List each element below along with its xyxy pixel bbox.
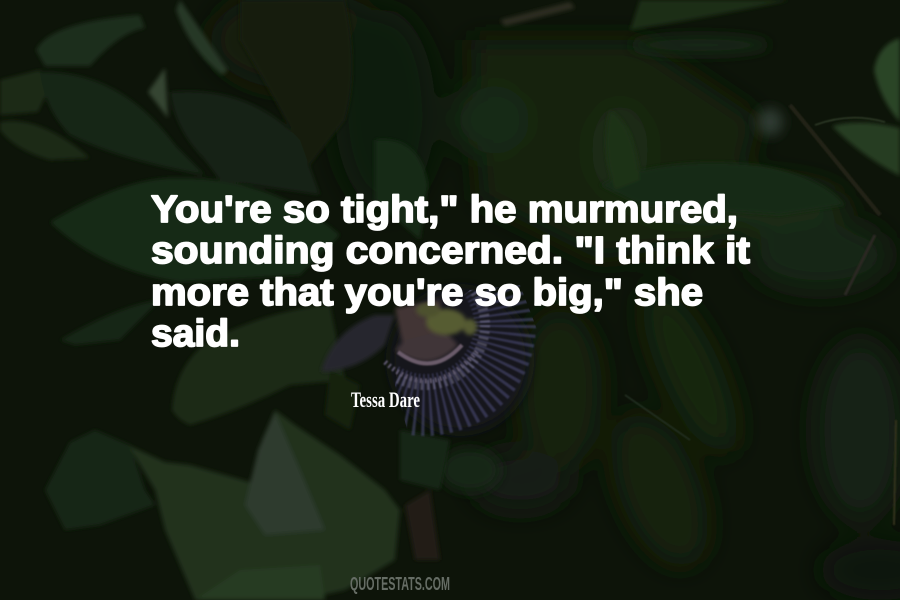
toothed leaves, bottom left <box>45 410 450 600</box>
stems and twigs <box>625 105 896 525</box>
quote text <box>151 189 750 355</box>
watermark: QUOTESTATS.COM <box>350 574 450 594</box>
author name: Tessa Dare <box>351 387 420 412</box>
icon: flower filaments <box>395 285 536 436</box>
sharp leaves, right side <box>500 0 900 215</box>
sharp leaves, top left <box>0 0 428 430</box>
decorative flower <box>322 285 536 436</box>
soft out-of-focus foliage on the right <box>210 0 900 600</box>
quote line 4: said. <box>151 313 240 355</box>
quote line 3: more that you're so big," she <box>151 272 703 314</box>
quote line 1: You're so tight," he murmured, <box>151 189 738 231</box>
quote line 2: sounding concerned. "I think it <box>151 230 750 272</box>
